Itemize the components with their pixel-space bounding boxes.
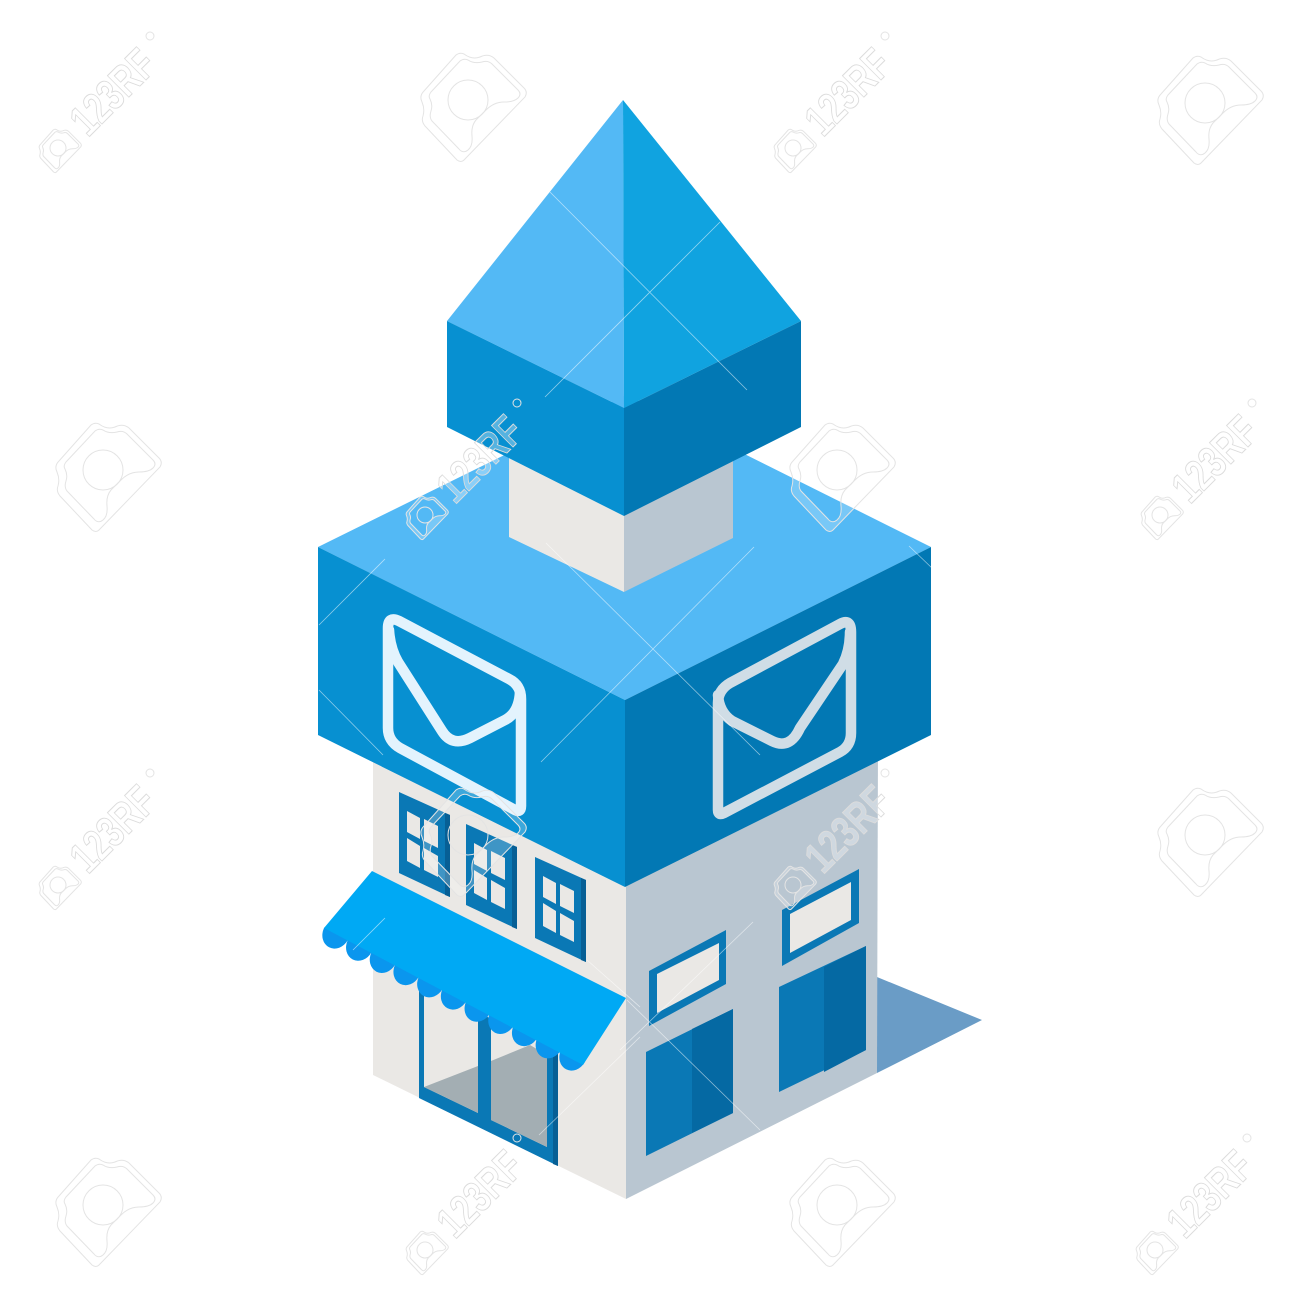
block left face [318,547,625,887]
watermark logos: 123RF [60,777,166,882]
upper block [318,395,931,887]
right wall sign window B [782,869,859,966]
watermark logos: 123RF [60,40,166,145]
isometric post office building [318,100,982,1199]
tower pillar [509,440,733,592]
watermark logos: 123RF [1157,1142,1263,1247]
watermark logos: 123RF [795,777,901,882]
storefront door [419,983,558,1166]
right wall [626,740,878,1199]
right wall door B [779,946,866,1092]
block top face [318,395,931,700]
icon: left envelope [388,619,521,811]
upper window right [535,857,586,962]
awning [322,871,626,1071]
upper window middle [466,824,517,929]
left wall [373,740,626,1199]
pointed roof [447,100,801,516]
right wall door A [646,1009,733,1156]
ground shadow [877,977,982,1073]
watermark logos: 123RF [795,40,901,145]
watermark logos: 123RF [1162,407,1268,512]
block right face [625,547,931,887]
icon: right envelope [718,622,851,814]
watermark logos: 123RF [427,407,533,512]
upper window left [399,792,450,897]
lower storey [322,740,878,1199]
right wall sign window A [649,930,726,1026]
watermark logos: 123RF [427,1142,533,1247]
